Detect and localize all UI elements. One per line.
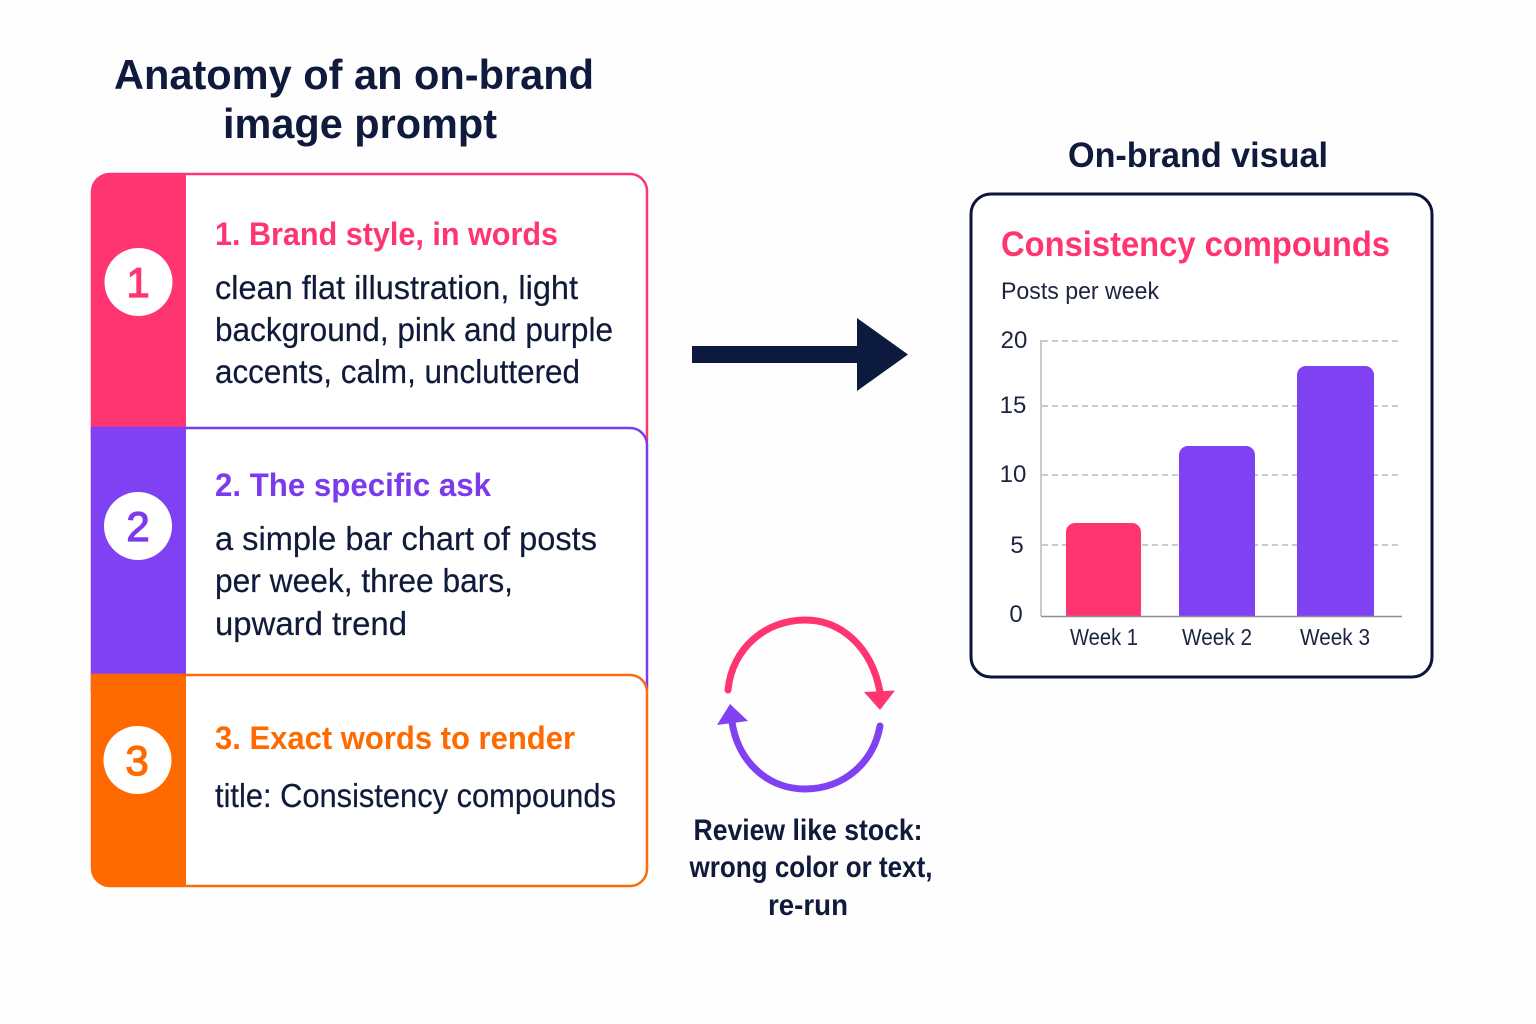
title [114,51,594,147]
icon: number 3 badge [104,726,172,794]
y axis labels: 5 [1010,532,1024,559]
card subtitle: Posts per week [1001,278,1160,305]
y axis labels: 20 [1001,327,1027,354]
x axis labels: Week 3 [1300,624,1370,650]
title: Anatomy of an on-brand [114,51,594,98]
x axis labels: Week 2 [1182,624,1252,650]
caption: review note: wrong color or text, [689,851,932,884]
bar: week 3 [1297,366,1374,616]
step 3 body text: title: Consistency compounds [215,777,616,814]
step 1 body text: clean flat illustration, light [215,269,578,306]
panel: step 2 specific ask [91,427,647,690]
y axis labels: 10 [1000,461,1026,488]
icon: number 1 badge [104,248,172,316]
heading: on-brand visual: On-brand visual [1068,136,1328,175]
caption: review note [689,814,932,922]
step 2 body text [215,520,597,642]
bar chart [1000,327,1402,650]
caption: review note: Review like stock: [694,814,922,847]
step 2 body text: a simple bar chart of posts [215,520,597,557]
caption: review note: re-run [768,889,848,922]
icon: number 2 badge: 2 [126,503,150,550]
panel: step 1 brand style [91,173,647,440]
step 3 heading: 3. Exact words to render [215,720,575,756]
y axis labels: 15 [1000,392,1026,419]
icon: review cycle arrows [717,620,895,789]
step 2 heading: 2. The specific ask [215,467,491,503]
icon: number 3 badge: 3 [125,737,149,784]
step 1 heading: 1. Brand style, in words [215,216,558,252]
panel: on-brand visual card [971,194,1432,677]
step 2 body text: per week, three bars, [215,562,513,599]
bar: week 1 [1066,523,1141,616]
bar: week 2 [1179,446,1255,616]
icon: number 2 badge [104,492,172,560]
step 1 body text: background, pink and purple [215,311,613,348]
card title: Consistency compounds [1001,225,1390,264]
x axis labels: Week 1 [1070,624,1138,650]
step 2 body text: upward trend [215,605,407,642]
step 1 body text: accents, calm, uncluttered [215,353,580,390]
panel: step 3 exact words [91,674,647,887]
y axis labels [1000,327,1027,628]
title: image prompt [223,100,497,147]
icon: number 1 badge: 1 [126,259,150,306]
y axis labels: 0 [1009,601,1023,628]
step 1 body text [215,269,613,390]
x axis labels [1070,624,1370,650]
arrow: prompt to visual [692,318,908,391]
